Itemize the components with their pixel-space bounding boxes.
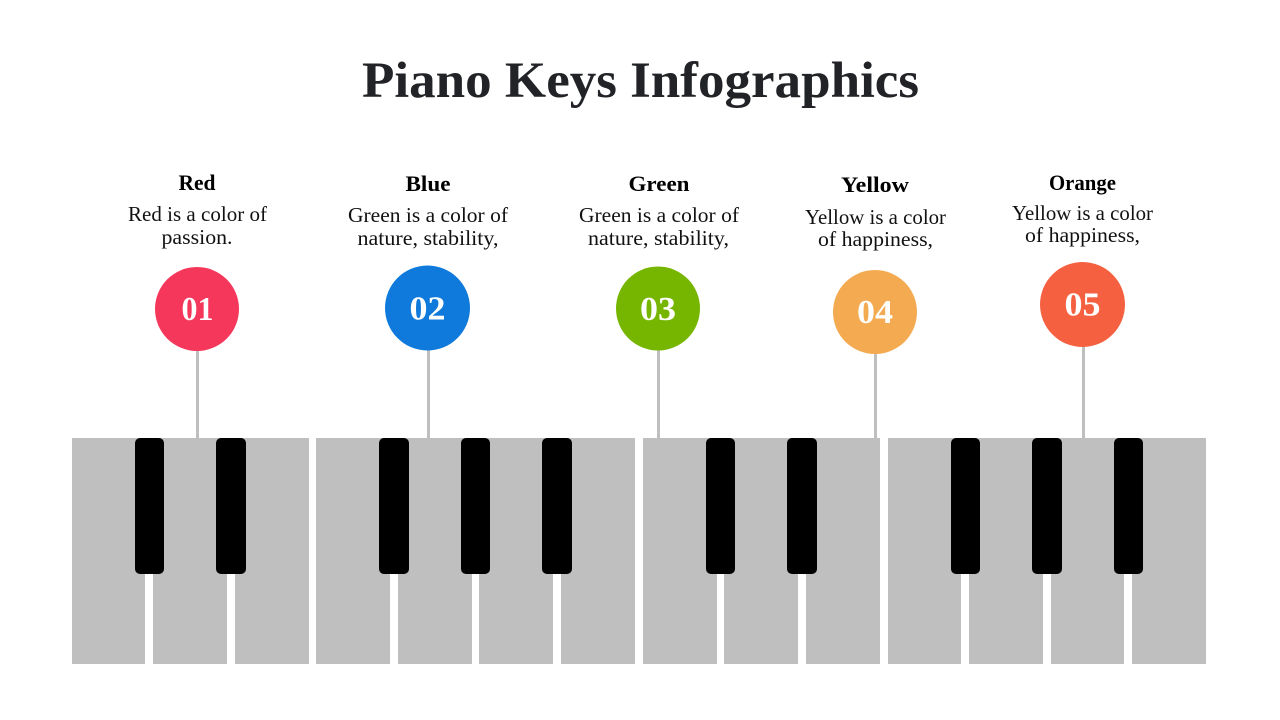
item 01: Red: 01 xyxy=(182,291,214,328)
item 05: Orange: 05 xyxy=(1064,286,1100,324)
item 01: Red: Red xyxy=(178,170,216,195)
item 03: Green: Green xyxy=(628,171,690,196)
item 04: Yellow: Yellow is a color xyxy=(805,205,946,229)
item 04: Yellow: 04 xyxy=(857,294,893,331)
item 03: Green xyxy=(579,171,740,350)
item 05: Orange: of happiness, xyxy=(1025,223,1140,247)
item 02: Blue: Green is a color of xyxy=(348,203,509,227)
item 04: Yellow: of happiness, xyxy=(818,227,933,251)
item 03: Green: nature, stability, xyxy=(588,226,729,250)
connector stems xyxy=(196,346,1085,440)
item 05: Orange: Yellow is a color xyxy=(1012,201,1153,225)
item 03: Green: 03 xyxy=(640,291,676,328)
white keys xyxy=(72,438,1206,664)
item 01: Red: passion. xyxy=(162,225,232,249)
item 03: Green: Green is a color of xyxy=(579,203,740,227)
title: Piano Keys Infographics xyxy=(362,53,919,109)
item 05: Orange: Orange xyxy=(1049,170,1116,195)
item 05: Orange xyxy=(1012,170,1153,347)
item 02: Blue: Blue xyxy=(406,171,451,196)
black keys xyxy=(135,438,1143,574)
item 04: Yellow xyxy=(805,172,946,354)
item 02: Blue xyxy=(348,171,509,350)
item 02: Blue: 02 xyxy=(410,290,446,328)
piano keyboard xyxy=(72,438,1206,664)
item 02: Blue: nature, stability, xyxy=(358,226,498,250)
item 01: Red xyxy=(128,170,268,351)
item 04: Yellow: Yellow xyxy=(841,172,909,197)
item 01: Red: Red is a color of xyxy=(128,202,268,226)
